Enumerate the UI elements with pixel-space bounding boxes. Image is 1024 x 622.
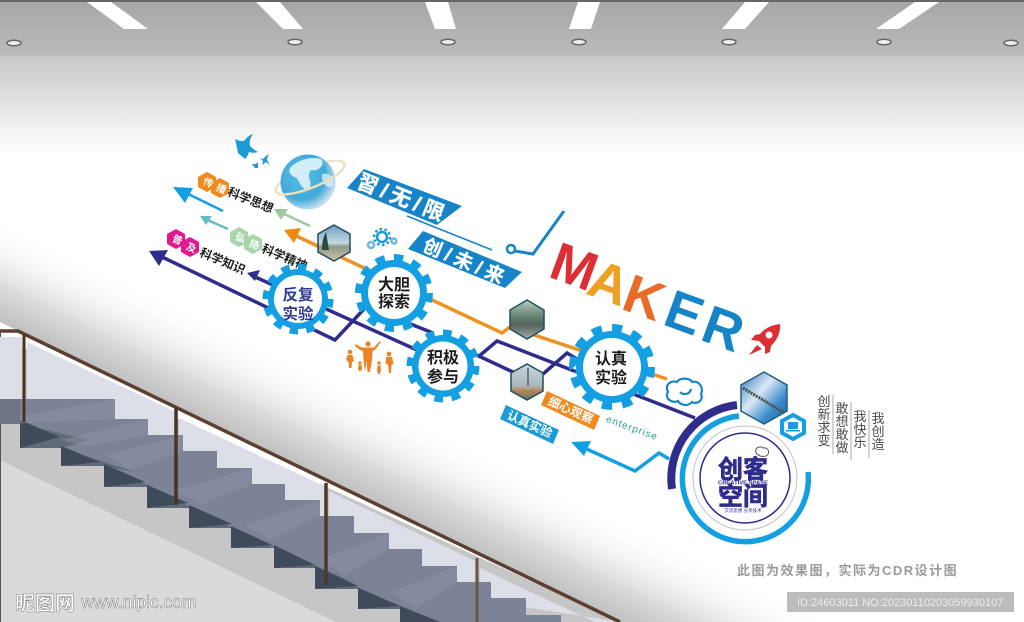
bottom blue arrow	[580, 446, 669, 471]
id box	[787, 592, 1014, 612]
icon: laptop hexagon	[782, 415, 804, 439]
vertical slogans: 我	[853, 409, 867, 424]
label: 认真实验	[500, 405, 559, 444]
title: MAKER	[543, 231, 752, 364]
note text: 此图为效果图，实际为CDR设计图	[737, 563, 958, 578]
vertical slogans: 敢	[835, 427, 849, 442]
label: 认真实验: 认真实验	[505, 407, 555, 441]
gear: 反复实验	[267, 268, 329, 330]
handrail and posts	[0, 331, 620, 622]
small purple arrow line	[253, 276, 417, 350]
emblem: 创客空间	[671, 405, 808, 542]
icon: birds	[235, 134, 270, 168]
banner divider	[407, 216, 492, 250]
emblem: 创客空间: CREATIVE SPASE	[718, 480, 768, 486]
photo hexagon: bridge	[741, 372, 787, 424]
vertical slogans: 敢	[835, 401, 849, 416]
teal arrow	[205, 219, 228, 229]
title: MAKER: A	[581, 248, 638, 318]
banner: 習/无/限: 習/无/限	[353, 170, 447, 226]
emblem: 创客空间: 空间	[718, 483, 768, 511]
gear: 认真实验	[574, 329, 650, 405]
label: 普及科学知识	[167, 229, 248, 277]
vertical slogans: 我	[871, 411, 885, 426]
title: MAKER: E	[657, 279, 711, 347]
photo hexagon: tower	[511, 364, 543, 400]
vertical slogans	[817, 394, 885, 460]
emblem: 创客空间: 交流思想 分享技术	[724, 507, 762, 514]
gear: 积极参与: 参与	[427, 367, 459, 386]
label: 普及科学知识: 及	[184, 241, 198, 256]
label: 细心观察: 细心观察	[546, 393, 596, 427]
orange main line	[290, 233, 667, 379]
top blue arrow	[180, 190, 223, 211]
staircase with glass railing	[0, 330, 620, 622]
gear: 积极参与	[411, 334, 475, 398]
label: enterprise: enterprise	[604, 414, 659, 443]
label: 弘扬科学精神: 弘	[233, 230, 248, 246]
circuit line	[515, 211, 564, 254]
ceiling with lights	[0, 0, 1024, 56]
watermark: 昵图网	[15, 593, 75, 615]
gear: 认真实验: 认真	[595, 350, 627, 368]
gear: 反复实验: 实验	[282, 304, 314, 323]
vertical slogans: 求	[817, 420, 831, 435]
connecting lines	[149, 187, 695, 471]
vertical slogans: 创	[817, 394, 831, 409]
title: MAKER: M	[543, 231, 606, 303]
vertical slogans: 造	[871, 437, 885, 452]
label: 弘扬科学精神: 科学精神	[260, 241, 310, 273]
gear: 大胆探索: 探索	[378, 293, 410, 311]
label: 普及科学知识: 科学知识	[198, 245, 248, 277]
label: 弘扬科学精神	[230, 227, 310, 273]
vertical slogans: 创	[871, 424, 885, 439]
vertical slogans: 想	[835, 414, 849, 429]
photo hexagon: beach	[318, 225, 350, 261]
label: 传播科学思想: 播	[214, 181, 229, 197]
emblem: 创客空间: 创客	[718, 455, 768, 484]
gear: 认真实验: 实验	[595, 368, 627, 387]
vertical slogans: 新	[817, 407, 831, 422]
gear: 大胆探索	[360, 259, 428, 327]
watermark	[15, 592, 197, 615]
icon: small gears	[368, 229, 396, 248]
icon: rocket	[749, 324, 780, 355]
vertical slogans: 乐	[853, 435, 867, 450]
vertical slogans: 快	[853, 422, 867, 437]
id box: ID:24603011 NO:20230110203059930107	[797, 597, 1003, 609]
title: MAKER: R	[695, 294, 752, 364]
watermark: www.nipic.com	[80, 592, 197, 612]
label: 弘扬科学精神: 扬	[247, 237, 262, 253]
label: 传播科学思想: 科学思想	[226, 184, 276, 216]
gear: 积极参与: 积极	[427, 349, 459, 367]
label: 传播科学思想: 传	[201, 175, 216, 191]
green arrow	[280, 212, 310, 226]
gear: 反复实验: 反复	[282, 286, 314, 304]
icon: globe	[275, 154, 345, 210]
label: 细心观察	[541, 391, 600, 430]
vertical slogans: 变	[817, 433, 831, 448]
icon: brain	[667, 379, 702, 405]
big purple arrow line	[158, 255, 365, 340]
gear: 大胆探索: 大胆	[378, 276, 410, 294]
label: 传播科学思想	[198, 172, 276, 216]
title: MAKER: K	[616, 263, 673, 333]
icon: people	[346, 341, 394, 374]
photo hexagon: street	[510, 300, 544, 339]
vertical slogans: 做	[835, 440, 849, 455]
label: 普及科学知识: 普	[170, 232, 185, 248]
purple line through gears	[408, 323, 433, 333]
banner: 创/未/来: 创/未/来	[419, 235, 507, 288]
